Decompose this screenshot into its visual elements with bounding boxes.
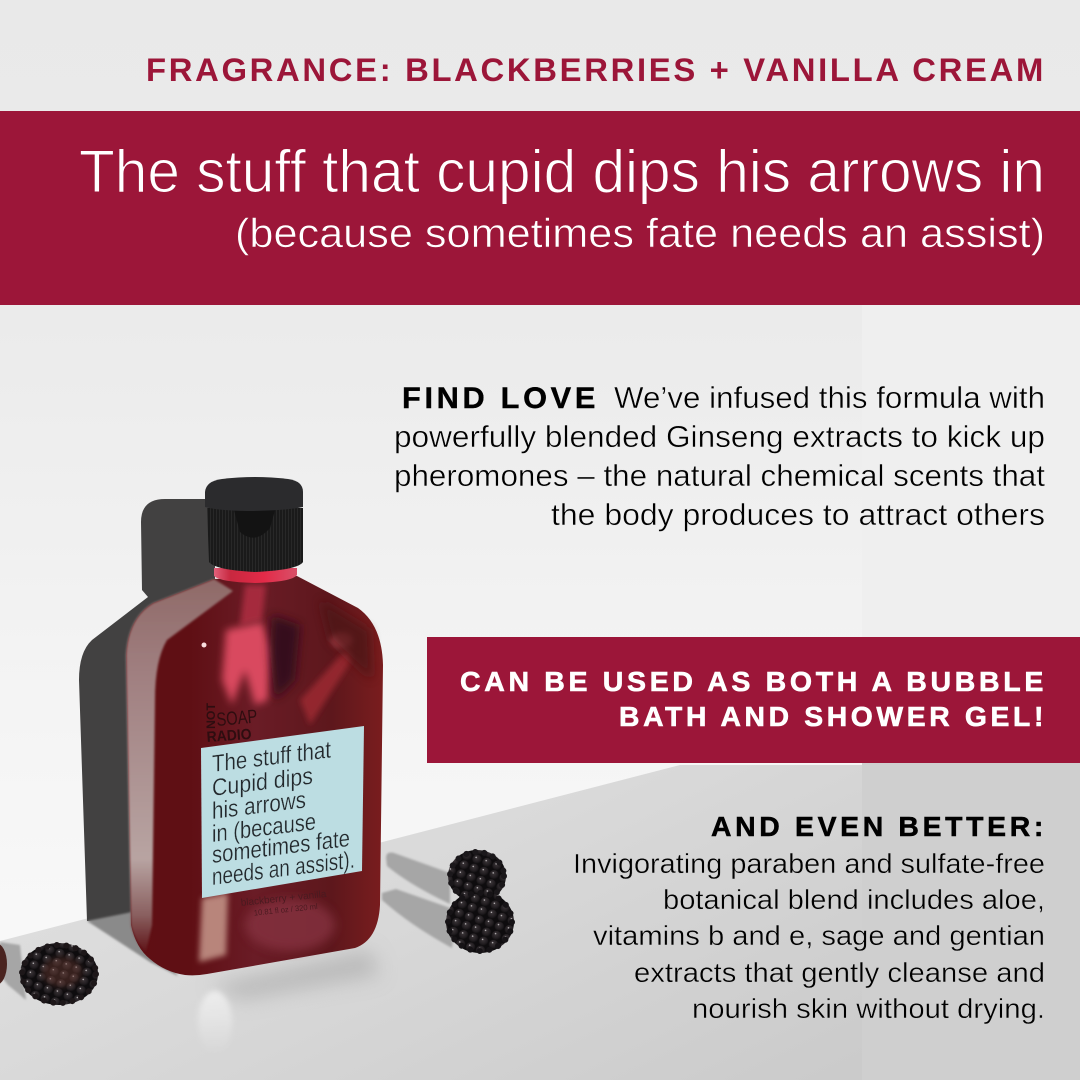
variant text under label: blackberry + vanilla [240, 889, 327, 909]
label text: sometimes fate [212, 825, 350, 869]
background: floor [0, 765, 1080, 1080]
variant text under label: 10.81 fl oz / 320 ml [253, 902, 318, 918]
callout text: BATH AND SHOWER GEL! [619, 701, 1047, 732]
bottom label reflection [199, 893, 228, 962]
text block: find love [394, 380, 1045, 532]
frosted left edge [126, 579, 233, 952]
brand mark: RADIO [206, 726, 252, 746]
label text [212, 734, 355, 891]
text block: and even better: AND EVEN BETTER: [711, 811, 1047, 842]
liquid reflections [222, 585, 372, 725]
bottle shadow on floor [87, 912, 178, 976]
fragrance heading: FRAGRANCE: BLACKBERRIES + VANILLA CREAM [146, 52, 1046, 88]
blackberry: cropped far left [0, 943, 7, 985]
text block: find love: We’ve infused this formula with [614, 380, 1045, 415]
pale bottom reflection [245, 899, 335, 951]
text block: find love: FIND LOVE [402, 382, 599, 415]
text block: find love: the body produces to attract others [551, 497, 1045, 532]
bottle neck ring [214, 568, 297, 583]
text block: and even better: Invigorating paraben and sulfate-free [573, 848, 1045, 879]
text block: find love: powerfully blended Ginseng extracts to kick up [394, 419, 1045, 454]
bottle body [126, 576, 383, 975]
callout text: CAN BE USED AS BOTH A BUBBLE [460, 666, 1047, 697]
text block: and even better [573, 811, 1047, 1024]
variant text under label [240, 889, 328, 919]
floor shadow under bottle [210, 950, 380, 1000]
text block: and even better: extracts that gently cleanse and [634, 957, 1045, 988]
label panel [201, 726, 364, 898]
product bottle [126, 477, 383, 975]
subtitle: (because sometimes fate needs an assist) [235, 210, 1045, 256]
specular highlight [202, 642, 206, 648]
label text: The stuff that [212, 736, 331, 778]
brand mark: NOT [204, 702, 218, 729]
brand mark: SOAP [216, 706, 258, 731]
callout text [460, 666, 1047, 732]
label text: his arrows [212, 787, 306, 825]
blackberry: left [20, 943, 98, 1005]
floor reflection highlight [198, 991, 232, 1053]
blackberry: back right [448, 850, 506, 902]
label text: Cupid dips [212, 763, 313, 802]
cap top [205, 477, 303, 511]
cap lower ribbed [207, 508, 303, 572]
text block: and even better: botanical blend includes aloe, [663, 884, 1045, 915]
label text: in (because [212, 808, 316, 848]
brand mark [204, 702, 258, 746]
berry shadows [0, 853, 456, 1000]
cap flip notch [234, 510, 275, 538]
text block: find love: pheromones – the natural chemical scents that [394, 458, 1045, 493]
background: right lighter panel [862, 305, 1080, 1080]
title: The stuff that cupid dips his arrows in [79, 138, 1045, 205]
text block: and even better: nourish skin without drying. [692, 993, 1045, 1024]
text block: and even better: vitamins b and e, sage and gentian [593, 920, 1045, 951]
callout banner [427, 637, 1080, 763]
label text: needs an assist). [212, 847, 355, 891]
blackberry: front right [446, 891, 514, 953]
title band [0, 111, 1080, 305]
bottle shadow on wall [79, 499, 215, 950]
